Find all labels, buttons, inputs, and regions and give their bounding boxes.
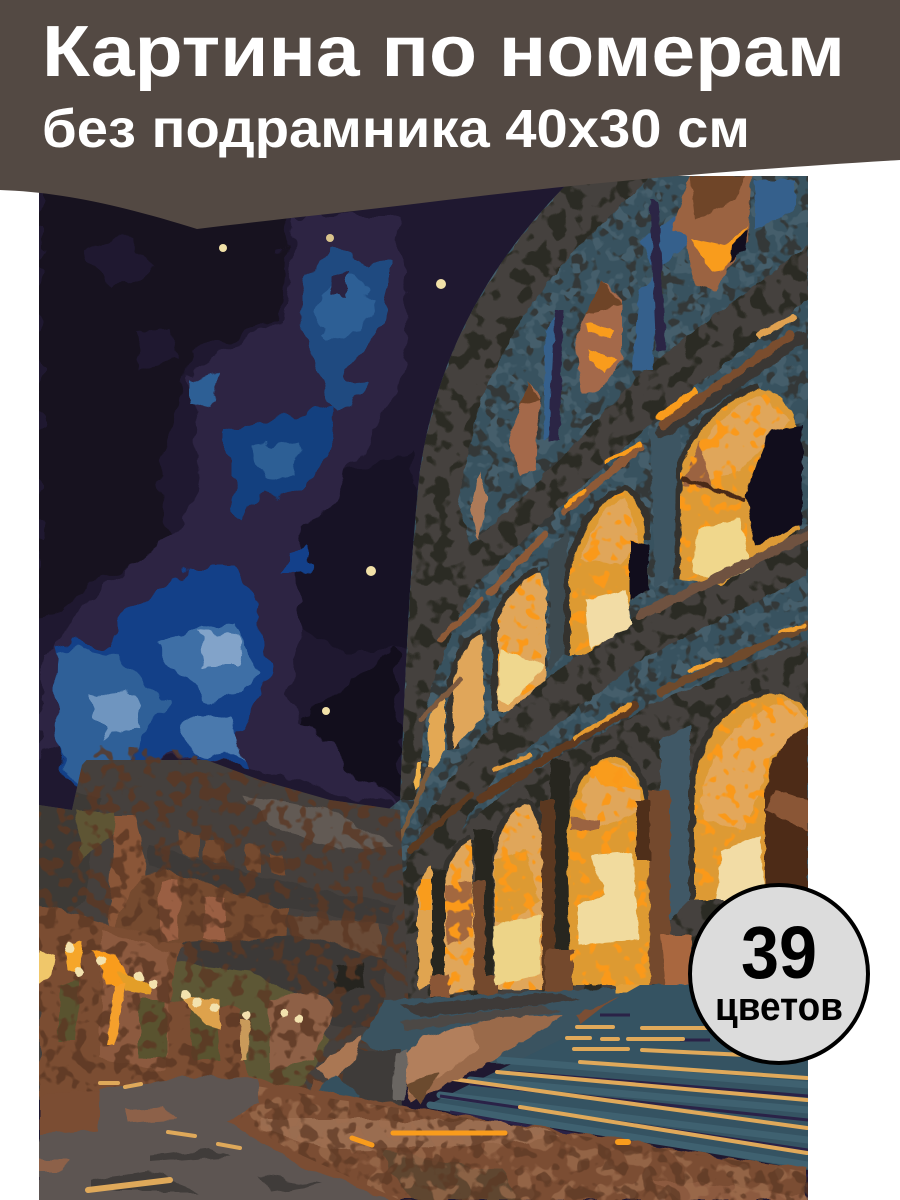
arch surrounds xyxy=(445,388,770,995)
subtitle: без подрамника 40х30 см xyxy=(42,99,750,159)
title: Картина по номерам xyxy=(42,12,845,92)
upper tier windows xyxy=(470,176,752,540)
staircase xyxy=(428,985,808,1176)
badge caption: цветов xyxy=(715,985,843,1029)
badge number: 39 xyxy=(741,911,817,994)
header banner xyxy=(0,0,900,229)
grey stone bands xyxy=(400,178,808,999)
terrace ledge xyxy=(360,985,680,1065)
lower tier arches xyxy=(418,695,808,1000)
stars xyxy=(219,234,446,715)
arch highlights xyxy=(445,388,798,994)
far building xyxy=(39,760,420,1100)
stone wedge xyxy=(310,1015,563,1110)
colosseum facade xyxy=(380,170,810,1050)
ground xyxy=(39,1078,810,1200)
upper tier: blue streaks xyxy=(544,180,795,440)
string lights xyxy=(39,942,303,1060)
painting: Colosseum at night xyxy=(39,170,810,1200)
arch light and openings xyxy=(493,425,808,985)
road xyxy=(39,1078,400,1200)
cornices xyxy=(385,318,808,870)
middle tier arches xyxy=(414,388,800,790)
badge: 39 colours xyxy=(690,885,868,1063)
night sky xyxy=(39,176,808,1200)
nebula: blue clouds xyxy=(50,245,385,810)
